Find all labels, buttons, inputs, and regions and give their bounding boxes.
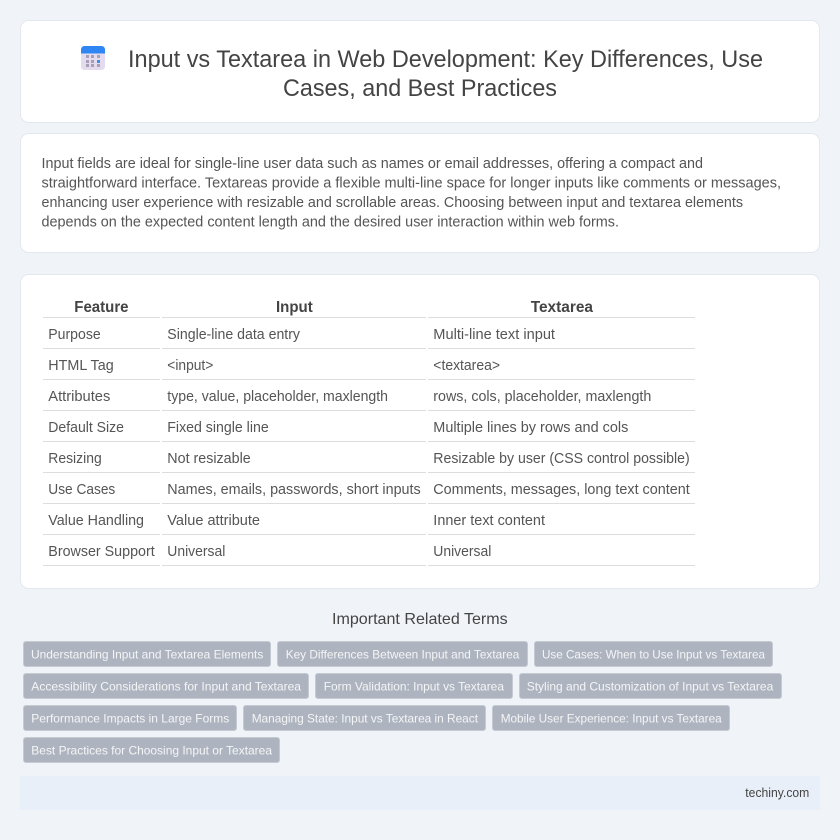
intro paragraph: Input fields are ideal for single-line user data such as names or email addresses, offering a compact and [42,156,703,172]
tag: accessibility [24,674,308,698]
title: Cases, and Best Practices [283,75,557,102]
row: resizing: Resizable by user (CSS control possible) [433,451,690,467]
tag: understanding [24,642,270,666]
title: Input vs Textarea in Web Development: Key Differences, Use [128,46,763,73]
row: browser support: Universal [433,544,491,560]
row: use cases: Comments, messages, long text content [433,482,690,498]
panel: introduction [20,134,820,252]
tag: accessibility: Accessibility Considerations for Input and Textarea [31,679,301,693]
row: html tag: <input> [167,358,213,374]
row: use cases: Names, emails, passwords, short inputs [167,482,421,498]
tag: mobile [492,706,730,730]
tag: use cases [534,642,772,666]
tag: key differences: Key Differences Between Input and Textarea [286,647,520,661]
intro paragraph: depends on the expected content length and the desired user interaction within web forms. [42,214,619,230]
tag: best practices [24,738,280,762]
tag: understanding: Understanding Input and Textarea Elements [31,647,263,661]
row: html tag: <textarea> [433,358,500,374]
row: purpose: Single-line data entry [167,327,301,343]
icon: calendar [81,46,105,70]
row: use cases [48,482,690,498]
table header [74,299,593,316]
row: resizing [48,451,690,467]
intro paragraph: straightforward interface. Textareas provide a flexible multi-line space for longer inputs like comments or messages, [42,176,781,192]
row: purpose: Purpose [48,327,101,343]
tag: performance [24,706,236,730]
panel: title card [20,20,820,122]
footer brand: techiny.com [745,786,809,800]
tag: mobile: Mobile User Experience: Input vs Textarea [501,711,722,725]
row: default size: Default Size [48,420,124,436]
table header: Input [276,299,313,316]
intro paragraph [42,156,781,230]
title [128,46,763,102]
row: default size: Fixed single line [167,420,269,436]
table header: Feature [74,299,129,316]
tag: form validation [316,674,512,698]
panel: footer [20,776,820,810]
row: resizing: Not resizable [167,451,251,467]
row: attributes: type, value, placeholder, maxlength [167,389,388,405]
tag: managing state: Managing State: Input vs Textarea in React [252,711,479,725]
row: attributes: Attributes [48,389,110,405]
row: html tag: HTML Tag [48,358,114,374]
row: attributes: rows, cols, placeholder, maxlength [433,389,651,405]
row: browser support: Browser Support [48,544,155,560]
row: default size: Multiple lines by rows and cols [433,420,628,436]
tag: managing state [244,706,486,730]
heading: related terms: Important Related Terms [332,611,508,628]
row: value handling [48,513,545,529]
row: value handling: Value Handling [48,513,144,529]
row: html tag [48,358,500,374]
row: value handling: Value attribute [167,513,260,529]
tag: styling: Styling and Customization of Input vs Textarea [527,679,774,693]
row: value handling: Inner text content [433,513,545,529]
tag: best practices: Best Practices for Choosing Input or Textarea [31,743,272,757]
row: browser support: Universal [167,544,225,560]
panel: comparison table [20,274,820,588]
row: resizing: Resizing [48,451,102,467]
tag: styling [520,674,782,698]
table header: Textarea [531,299,593,316]
row: browser support [48,544,491,560]
row: purpose [48,327,555,343]
tag: performance: Performance Impacts in Large Forms [31,711,229,725]
tag: use cases: Use Cases: When to Use Input vs Textarea [542,647,765,661]
tag: key differences [278,642,528,666]
row: purpose: Multi-line text input [433,327,555,343]
tag: form validation: Form Validation: Input vs Textarea [324,679,504,693]
row: use cases: Use Cases [48,482,115,498]
row: default size [48,420,628,436]
row: attributes [48,389,651,405]
intro paragraph: enhancing user experience with resizable and scrollable areas. Choosing between input and textarea elements [42,195,743,211]
panel: related term tags [24,642,782,762]
